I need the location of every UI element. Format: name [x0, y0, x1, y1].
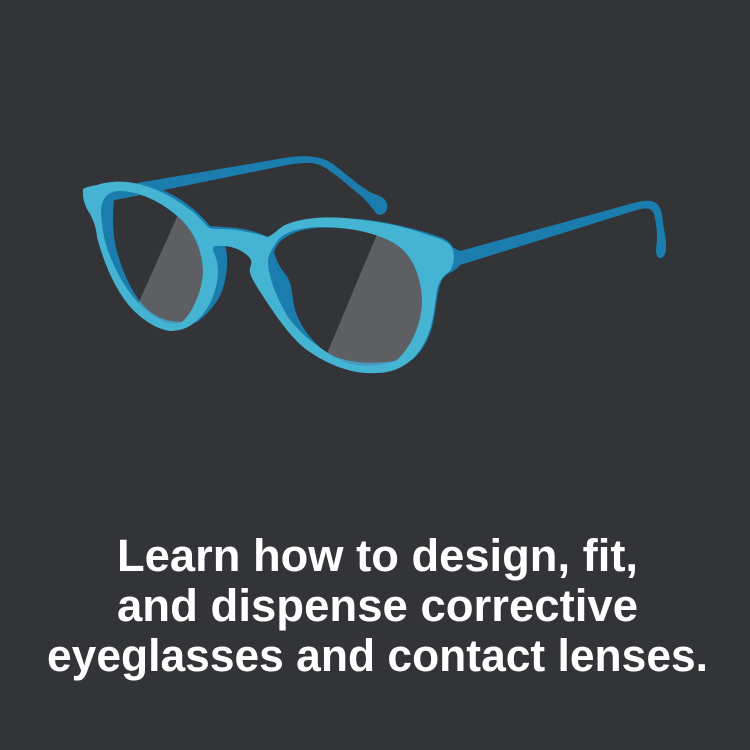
headline text: and dispense corrective	[117, 580, 638, 631]
headline text	[47, 530, 708, 681]
near temple arm	[445, 201, 666, 274]
back frame shadow	[100, 189, 454, 370]
left lens glare	[138, 216, 203, 324]
right lens glare	[328, 236, 422, 366]
illustration: blue eyeglasses	[83, 156, 666, 375]
far temple arm	[115, 156, 387, 215]
headline text: eyeglasses and contact lenses.	[47, 630, 708, 681]
headline text: Learn how to design, fit,	[117, 530, 638, 581]
front frame	[83, 182, 454, 373]
